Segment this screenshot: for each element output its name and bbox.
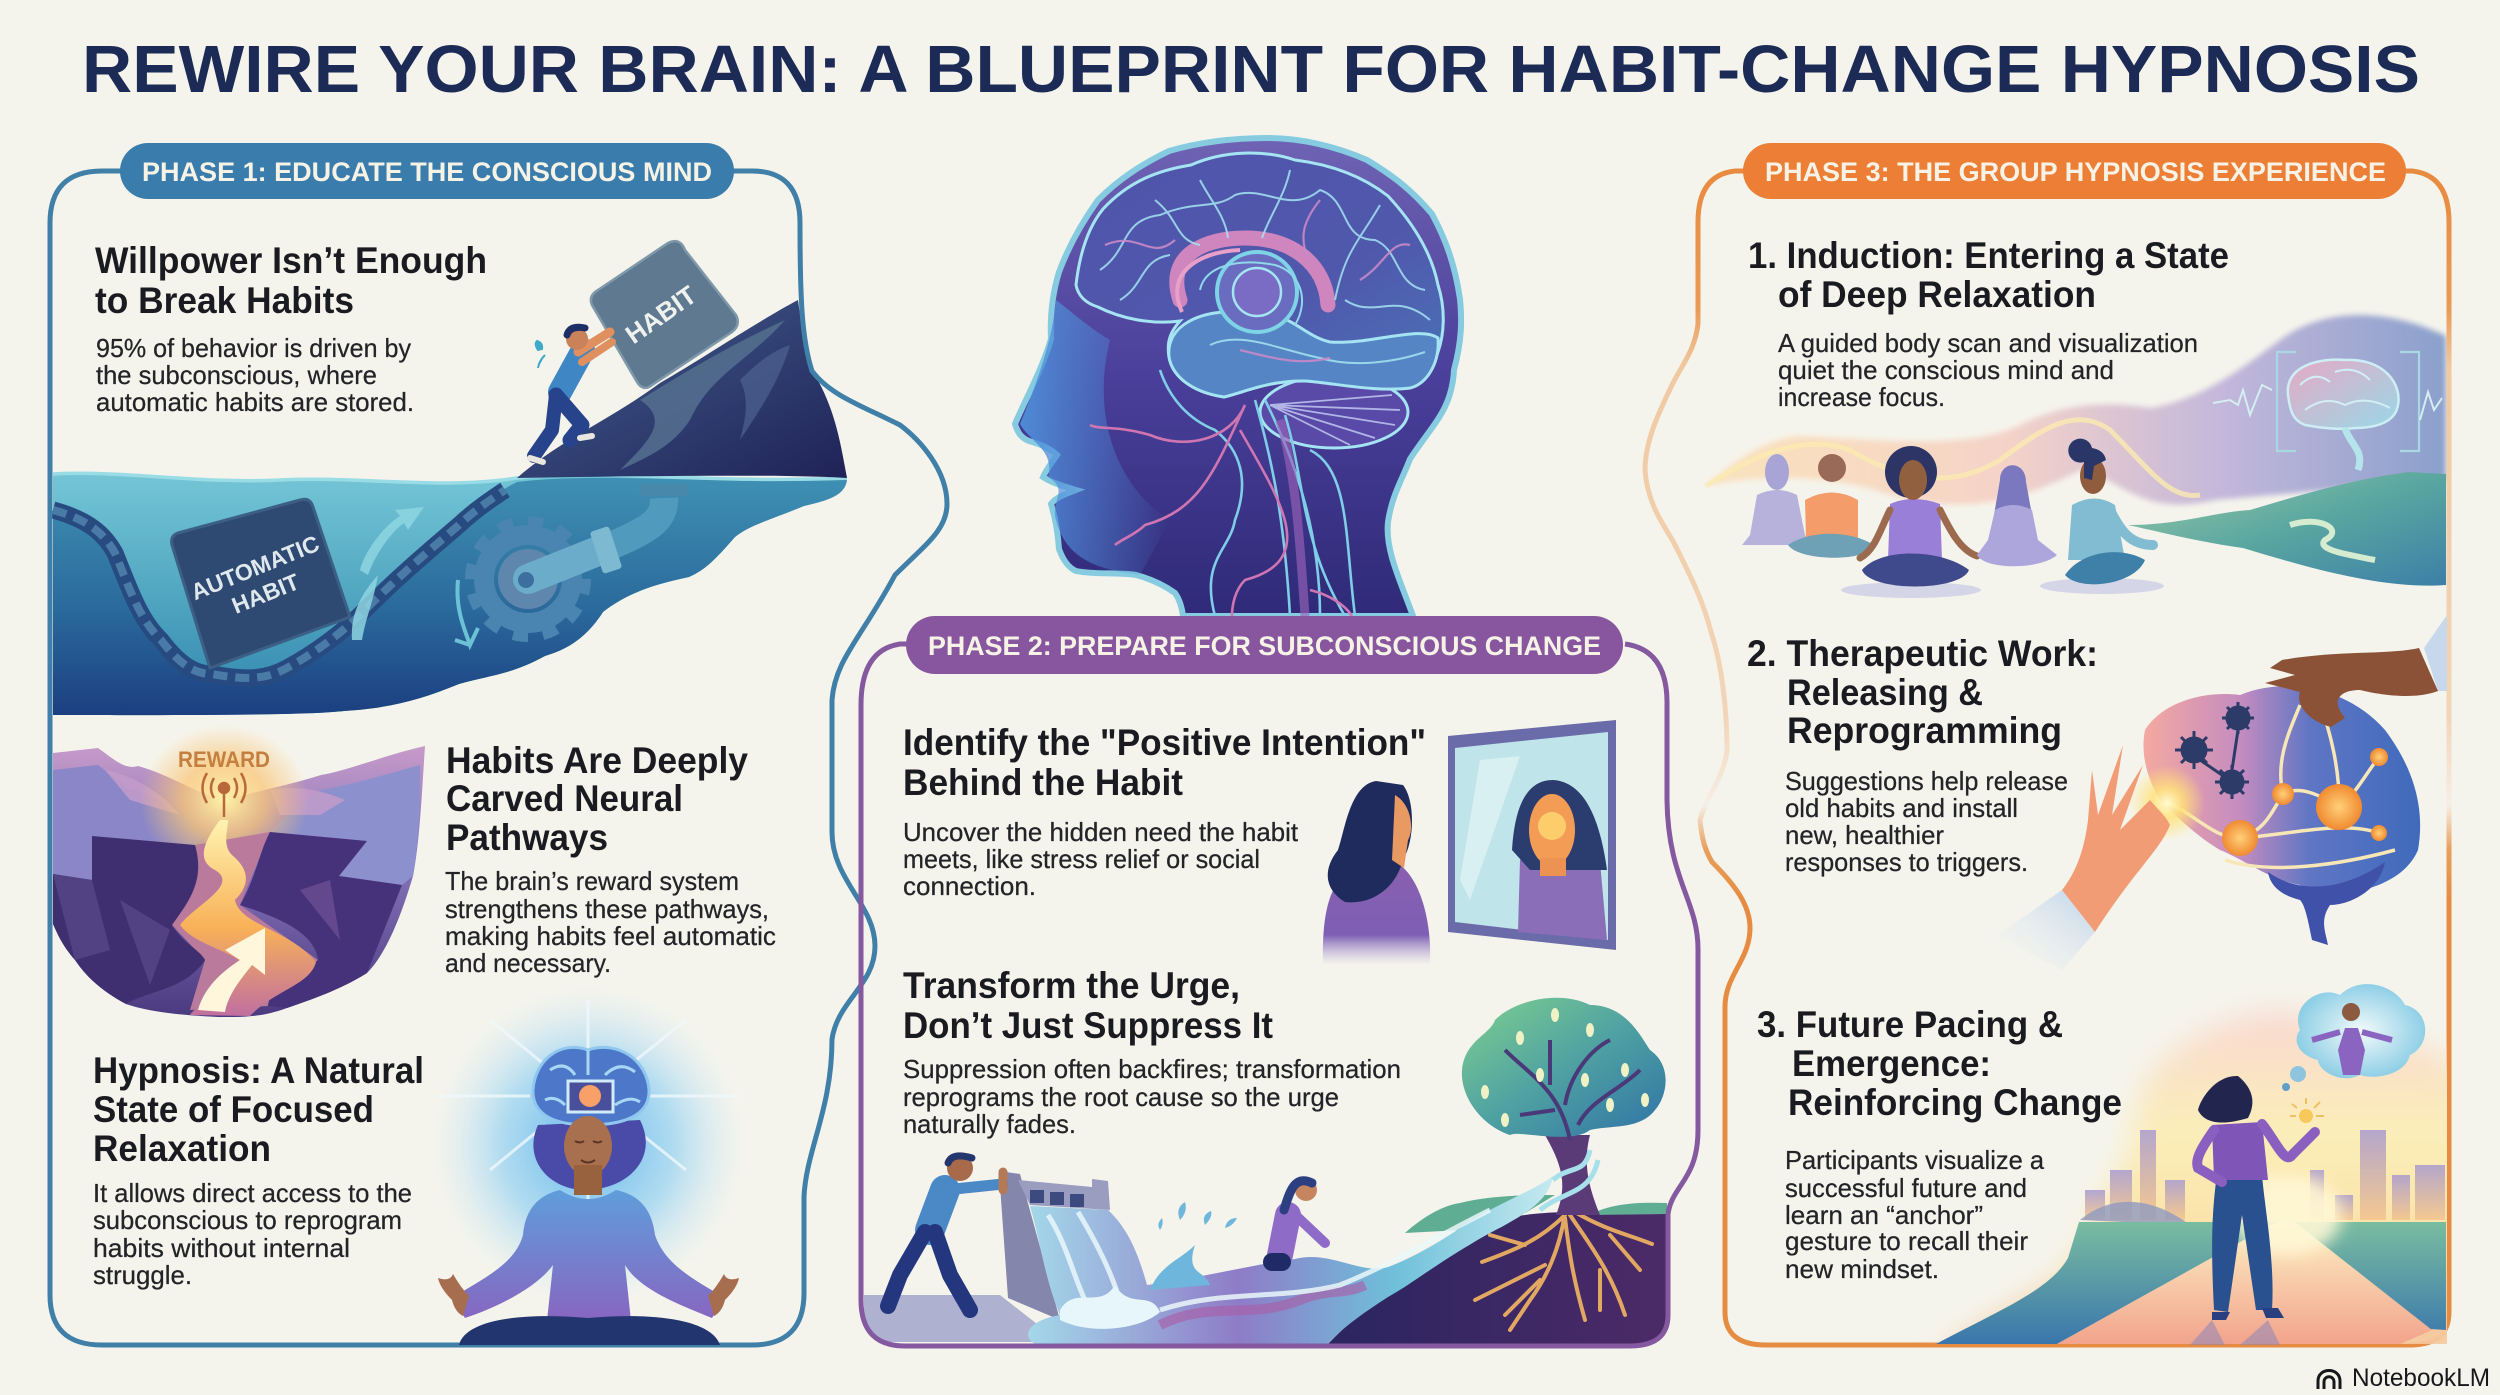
text block: neural pathways: Pathways xyxy=(446,817,608,858)
text block: neural pathways: Carved Neural xyxy=(446,778,683,819)
belt xyxy=(53,490,505,678)
illustration: meditating woman with glowing brain xyxy=(430,985,746,1345)
panel outline xyxy=(50,171,947,1345)
block label: HABIT xyxy=(228,568,303,619)
hill xyxy=(517,300,847,478)
text block: hypnosis: It allows direct access to the xyxy=(93,1178,412,1208)
nerves xyxy=(1090,370,1355,616)
text block: transform the urge: reprograms the root cause so the urge xyxy=(903,1082,1339,1112)
text block: willpower xyxy=(95,240,487,417)
text block: induction: quiet the conscious mind and xyxy=(1778,355,2114,385)
illustration: reward canyon xyxy=(53,725,425,1017)
person 1 ghost xyxy=(1742,454,1812,545)
woman xyxy=(2190,1076,2315,1345)
text block: neural pathways: strengthens these pathways, xyxy=(445,894,769,924)
title: REWIRE YOUR BRAIN: A BLUEPRINT FOR HABIT-CHANGE HYPNOSIS xyxy=(82,32,2420,107)
gear xyxy=(455,484,688,645)
illustration: woman looking in mirror xyxy=(1323,720,1616,965)
text block: induction: of Deep Relaxation xyxy=(1778,274,2096,315)
green hill xyxy=(1405,1195,1667,1233)
text block: future pacing: successful future and xyxy=(1785,1173,2027,1203)
text block: future pacing: Participants visualize a xyxy=(1785,1145,2045,1175)
illustration: woman looking to future city xyxy=(1936,984,2470,1360)
reward label: REWARD xyxy=(178,747,270,772)
header pill: PHASE 3: THE GROUP HYPNOSIS EXPERIENCE xyxy=(1765,157,2386,187)
sweat drops xyxy=(536,341,545,368)
face xyxy=(564,1116,612,1176)
panel: phase 2 prepare for subconscious change xyxy=(861,616,1698,1346)
small brain xyxy=(2288,360,2399,429)
header pill xyxy=(906,616,1623,674)
ledges xyxy=(53,765,205,880)
lower hand xyxy=(2062,745,2170,932)
text block: future pacing: Emergence: xyxy=(1792,1043,1991,1084)
person 3 purple xyxy=(1841,446,1981,598)
hair xyxy=(533,1120,646,1190)
limbic arc xyxy=(1177,238,1328,305)
tree xyxy=(1545,1135,1600,1215)
legs xyxy=(459,1316,720,1345)
canyon floor xyxy=(172,832,318,1010)
illustration: hands reprogramming brain xyxy=(1996,615,2447,970)
nodes xyxy=(2222,748,2388,856)
panel outline xyxy=(1645,171,2449,1345)
text block: willpower: automatic habits are stored. xyxy=(96,387,414,417)
header pill xyxy=(120,143,734,199)
sky xyxy=(1936,1011,2470,1360)
person 5 teal xyxy=(2040,439,2164,594)
spark xyxy=(2129,765,2205,841)
text block: willpower: to Break Habits xyxy=(95,280,354,321)
torso xyxy=(452,1190,725,1330)
stream up trunk xyxy=(1540,1150,1598,1210)
chip xyxy=(568,1081,613,1112)
text block: neural pathways xyxy=(445,740,776,978)
ground xyxy=(864,1295,1060,1342)
block label: AUTOMATIC xyxy=(187,530,323,605)
face glow xyxy=(1020,300,1170,575)
text block: future pacing: 3. Future Pacing & xyxy=(1757,1004,2063,1045)
woman front xyxy=(1323,865,1430,965)
flow arrows xyxy=(352,507,424,640)
arrow xyxy=(198,928,265,1012)
bulb xyxy=(2299,1109,2313,1123)
scan frame xyxy=(2277,352,2419,451)
left cliff xyxy=(53,836,205,1004)
text block: hypnosis: Relaxation xyxy=(93,1128,271,1169)
text block: therapeutic work: Releasing & xyxy=(1787,672,1983,713)
panel: phase 3 the group hypnosis experience xyxy=(1645,143,2470,1360)
text block: induction: 1. Induction: Entering a State xyxy=(1748,235,2229,276)
ecg xyxy=(2213,385,2442,420)
text block: future pacing: gesture to recall their xyxy=(1785,1226,2028,1256)
folds xyxy=(1100,170,1430,363)
text block: therapeutic work: old habits and install xyxy=(1785,793,2018,823)
text block: willpower: Willpower Isn’t Enough xyxy=(95,240,487,281)
brain body xyxy=(2143,686,2420,899)
text block: therapeutic work: Suggestions help release xyxy=(1785,766,2068,796)
lower sleeve xyxy=(1996,890,2095,970)
text block: neural pathways: and necessary. xyxy=(445,948,611,978)
splash xyxy=(1150,1202,1237,1290)
text block: therapeutic work xyxy=(1747,633,2098,877)
brain xyxy=(1076,153,1443,448)
woman touching water xyxy=(1272,1179,1325,1262)
text block: therapeutic work: new, healthier xyxy=(1785,820,1944,850)
temporal lobe xyxy=(1169,312,1438,397)
skyline xyxy=(2085,1130,2445,1220)
text block: transform the urge xyxy=(903,965,1401,1139)
illustration: boulder pushed uphill above subconscious water xyxy=(53,241,847,715)
text block: hypnosis: subconscious to reprogram xyxy=(93,1205,402,1235)
text block: hypnosis xyxy=(93,1050,424,1290)
text block: induction xyxy=(1748,235,2229,412)
header pill xyxy=(1743,143,2406,199)
text block: hypnosis: habits without internal xyxy=(93,1233,350,1263)
boulder label: HABIT xyxy=(620,279,702,350)
person pushing dam xyxy=(888,1155,1003,1310)
text block: positive intention xyxy=(903,722,1426,901)
text block: positive intention: meets, like stress relief or social xyxy=(903,844,1260,874)
text block: future pacing: Reinforcing Change xyxy=(1788,1082,2122,1123)
signal icon xyxy=(202,773,246,817)
text block: therapeutic work: Reprogramming xyxy=(1787,710,2062,751)
text block: transform the urge: Suppression often backfires; transformation xyxy=(903,1054,1401,1084)
person pushing xyxy=(530,327,612,462)
thought cloud xyxy=(2282,984,2425,1091)
person 2 orange xyxy=(1788,454,1874,558)
river xyxy=(180,820,316,1016)
illustration: dam, flowing water and tree xyxy=(864,998,1667,1344)
text block: positive intention: Behind the Habit xyxy=(903,762,1183,803)
reflection xyxy=(1518,850,1607,940)
cerebellum and stem xyxy=(2268,862,2385,945)
text block: induction: A guided body scan and visualization xyxy=(1778,328,2198,358)
text block: future pacing: learn an “anchor” xyxy=(1785,1200,1983,1230)
text block: neural pathways: The brain’s reward system xyxy=(445,866,739,896)
boulder xyxy=(591,241,738,388)
brain xyxy=(533,1047,649,1125)
soil xyxy=(1328,1212,1666,1344)
text block: therapeutic work: 2. Therapeutic Work: xyxy=(1747,633,2098,674)
text block: transform the urge: naturally fades. xyxy=(903,1109,1076,1139)
text block: willpower: the subconscious, where xyxy=(96,360,377,390)
pathways xyxy=(2167,705,2395,867)
text block: positive intention: Identify the "Positive Intention" xyxy=(903,722,1426,763)
icon xyxy=(2318,1370,2340,1389)
illustration: group relaxation waves xyxy=(1706,315,2446,598)
hands xyxy=(438,1274,739,1316)
text block: hypnosis: Hypnosis: A Natural xyxy=(93,1050,424,1091)
upper sleeve xyxy=(2424,615,2447,691)
text block: neural pathways: making habits feel automatic xyxy=(445,921,776,951)
text block: transform the urge: Transform the Urge, xyxy=(903,965,1240,1006)
person 4 ghost xyxy=(1977,465,2057,566)
panel: phase 1 educate the conscious mind xyxy=(50,143,947,1345)
water xyxy=(53,473,847,715)
text block: induction: increase focus. xyxy=(1778,382,1945,412)
text block: future pacing xyxy=(1757,1004,2122,1284)
upper hand xyxy=(2265,648,2438,727)
dam xyxy=(999,1171,1060,1320)
water flow xyxy=(1028,1176,1553,1344)
central illustration: head with glowing brain xyxy=(1015,138,1461,616)
hills xyxy=(2128,472,2446,586)
dark neurons xyxy=(2175,702,2254,799)
text block: positive intention: Uncover the hidden need the habit xyxy=(903,817,1299,847)
header pill: PHASE 2: PREPARE FOR SUBCONSCIOUS CHANGE xyxy=(928,631,1601,661)
text block: therapeutic work: responses to triggers. xyxy=(1785,847,2028,877)
roots xyxy=(1475,1212,1652,1330)
text block: willpower: 95% of behavior is driven by xyxy=(96,333,411,363)
text block: transform the urge: Don’t Just Suppress It xyxy=(903,1005,1273,1046)
brand: NotebookLM: NotebookLM xyxy=(2352,1364,2490,1392)
text block: positive intention: connection. xyxy=(903,871,1036,901)
mirror xyxy=(1448,720,1616,950)
road xyxy=(2057,1216,2432,1344)
right cliff xyxy=(240,832,402,1008)
panel outline xyxy=(861,644,1698,1346)
text block: hypnosis: State of Focused xyxy=(93,1089,374,1130)
text block: future pacing: new mindset. xyxy=(1785,1254,1939,1284)
header pill: PHASE 1: EDUCATE THE CONSCIOUS MIND xyxy=(142,157,712,187)
automatic habit block xyxy=(172,499,350,668)
text block: hypnosis: struggle. xyxy=(93,1260,192,1290)
cerebellum xyxy=(1260,376,1408,448)
text block: neural pathways: Habits Are Deeply xyxy=(446,740,748,781)
land xyxy=(1936,1216,2446,1344)
